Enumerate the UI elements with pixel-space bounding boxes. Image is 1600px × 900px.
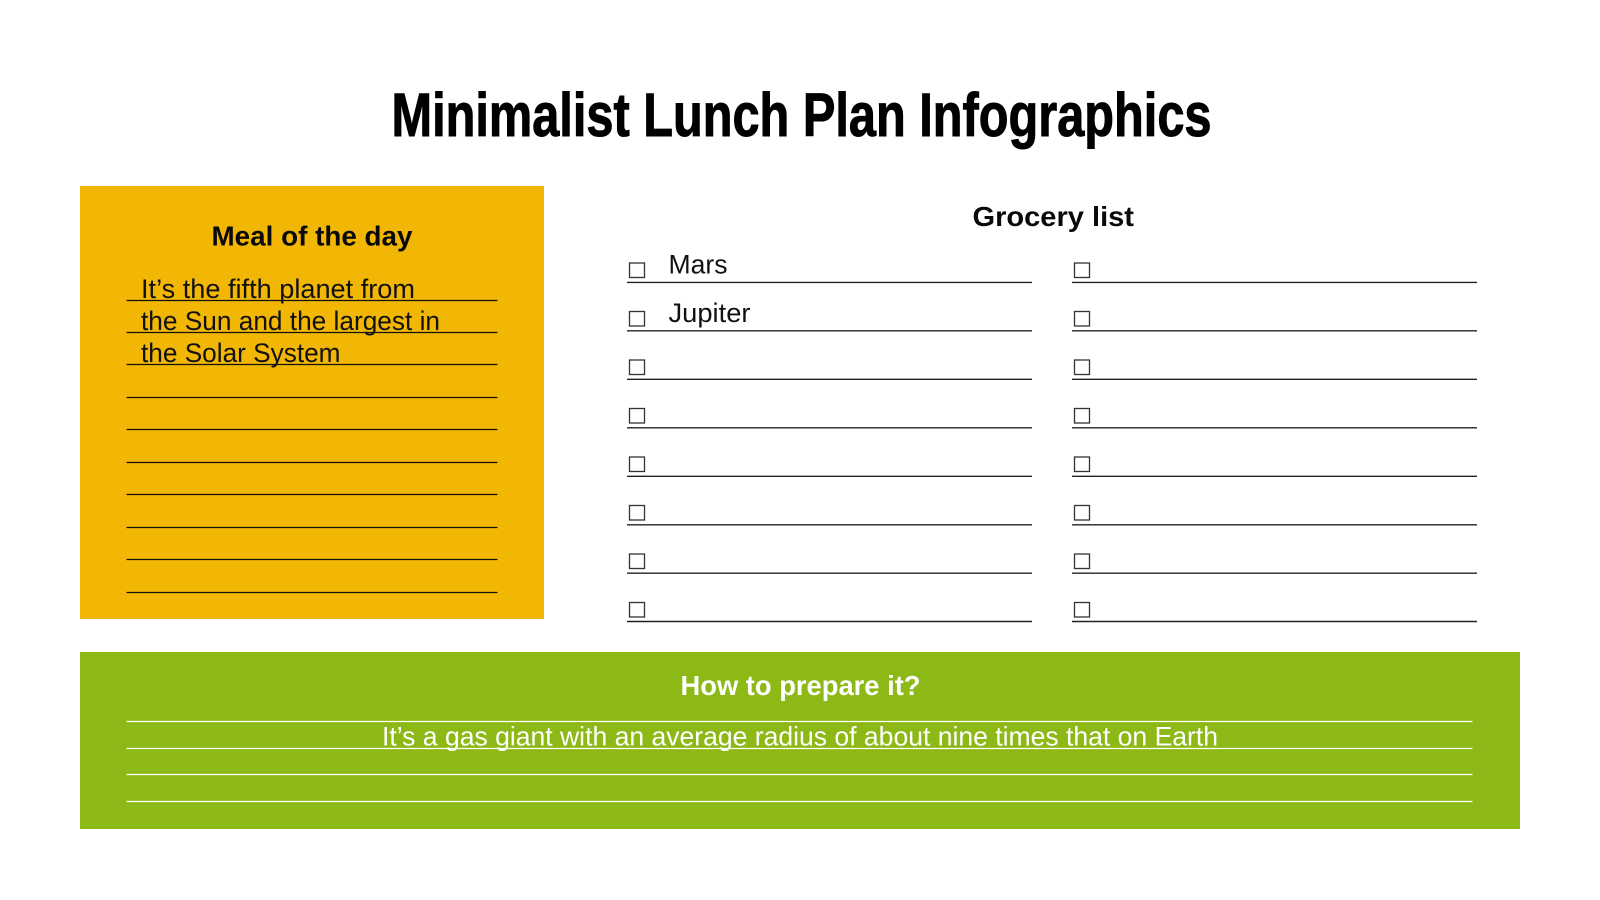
ruled lines: preparation notes: [126, 722, 1472, 802]
heading: how to prepare it: How to prepare it?: [680, 670, 920, 701]
ruled lines: left column: [627, 282, 1032, 622]
text block: meal description: [141, 274, 440, 368]
ruled lines: right column: [1072, 282, 1477, 622]
text block: meal description: It’s the fifth planet from: [141, 274, 415, 304]
text block: meal description: the Solar System: [141, 338, 340, 368]
title: Minimalist Lunch Plan Infographics: [392, 81, 1212, 149]
checkboxes: left column: [630, 263, 644, 617]
grocery item: Jupiter: Jupiter: [668, 298, 751, 328]
grocery item: Mars: Mars: [668, 250, 728, 280]
heading: meal of the day: Meal of the day: [212, 220, 413, 252]
heading: grocery list: Grocery list: [972, 201, 1134, 232]
ruled lines: meal notes: [126, 300, 498, 592]
panel: how to prepare it: [80, 652, 1520, 829]
panel: grocery list: [627, 201, 1477, 622]
text block: preparation description: It’s a gas giant with an average radius of about nine times that on Earth: [382, 722, 1218, 752]
checkboxes: right column: [1074, 263, 1090, 617]
text block: meal description: the Sun and the largest in: [141, 306, 440, 336]
panel: meal of the day: [80, 186, 544, 619]
